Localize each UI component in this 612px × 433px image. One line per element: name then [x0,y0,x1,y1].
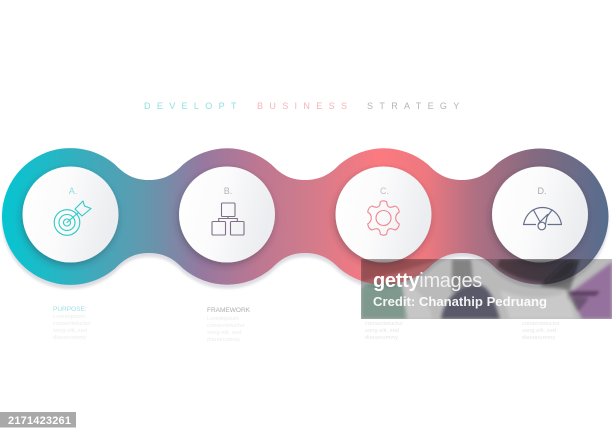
text block: framework: Loremipsum [207,316,239,322]
text block: measure [522,321,560,341]
title: BUSINESS [257,101,353,111]
text block: measure: consectetuctur [522,321,560,327]
text block: framework: FRAMEWORK [207,307,251,314]
text block: process: consectetuctur [365,321,403,327]
panel: C gear [336,166,432,262]
text block: framework: dianonummy [207,337,240,343]
icon: gauge [524,208,562,230]
title: STRATEGY [367,101,466,111]
text block: measure: dianonummy [522,335,555,341]
text block: process: song elit, sed [365,328,399,334]
watermark credit: Credit: Chanathip Pedruang [373,294,547,309]
watermark: getty images [361,259,612,319]
text block: framework: consectetuctur [207,323,245,329]
text block: measure: song elit, sed [522,328,556,334]
text block: purpose: dianonummy [53,335,86,341]
text block: framework [207,307,251,343]
panel: D gauge [492,166,588,262]
text block: framework: song elit, sed [207,330,241,336]
letter C: C. [380,186,389,196]
panel: B framework [179,166,275,262]
panel: A purpose [22,166,118,262]
gradient band [2,148,608,285]
text block: purpose: PURPOSE: [53,306,87,313]
letter B: B. [224,186,232,196]
letter A: A. [69,186,77,196]
icon: hierarchy [212,203,244,235]
title [144,101,466,111]
image id tag [0,412,76,428]
text block: process [365,321,403,341]
text block: purpose [53,306,91,341]
text block: purpose: Loremipsum [53,314,85,320]
text block: purpose: song elit, sed [53,328,87,334]
image id tag: 2171423261 [8,415,71,427]
icon: target with arrow [54,201,91,235]
text block: purpose: consectetuctur [53,321,91,327]
icon: gear [368,201,399,235]
watermark wordmark: gettyimages [373,270,482,292]
text block: process: dianonummy [365,335,398,341]
band shadow [2,152,608,289]
title: DEVELOPT [144,101,243,111]
letter D: D. [538,186,546,196]
